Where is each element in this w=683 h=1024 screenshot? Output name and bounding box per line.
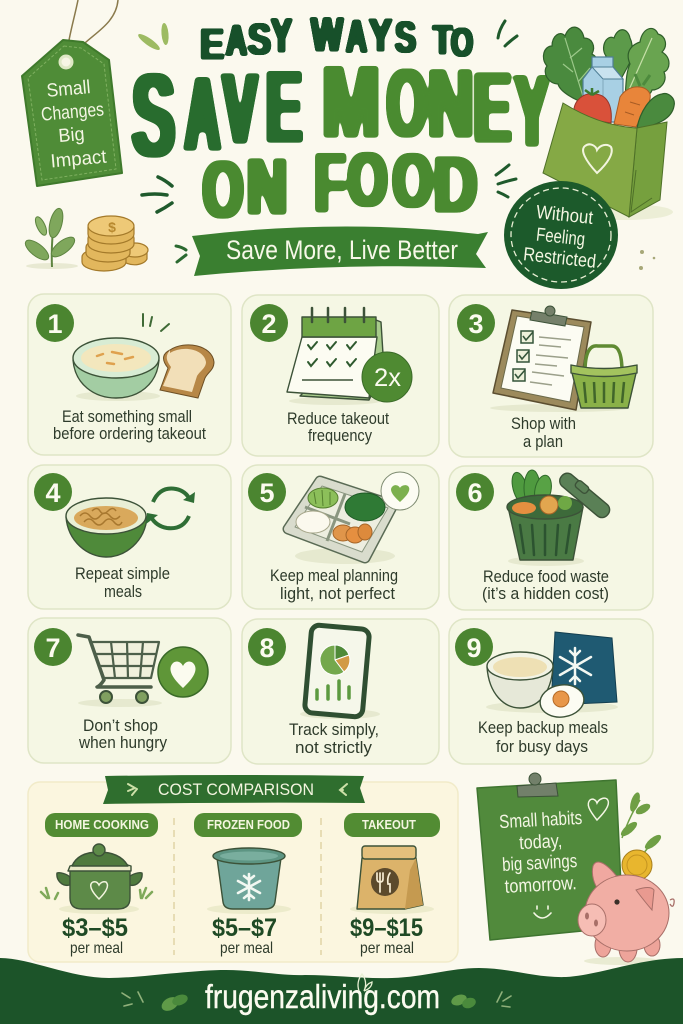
caption 2: frequency (308, 426, 372, 445)
note: small habits clipboard: tomorrow. (504, 873, 577, 898)
column: home cooking: $3–$5 (62, 914, 128, 942)
caption 1: before ordering takeout (53, 424, 206, 443)
number 8: 8 (259, 633, 275, 663)
title: easy ways to: A (346, 10, 367, 62)
caption 5: Keep meal planning (270, 566, 398, 585)
caption 4: Repeat simple (75, 564, 170, 583)
icon: compost bin with scraps (507, 470, 612, 566)
caption 8 (289, 720, 379, 757)
note: small habits clipboard (477, 773, 623, 940)
caption 6 (482, 567, 609, 603)
number 3: 3 (468, 309, 484, 339)
title: on food: O (203, 145, 243, 235)
caption 3 (511, 414, 576, 451)
tag: small changes big impact (22, 0, 122, 186)
caption 7: Don’t shop (83, 716, 158, 735)
text: Y (515, 54, 549, 168)
title: easy ways to: E (200, 20, 224, 69)
icon: leaves behind piggy bank (619, 791, 663, 860)
decorative accents around title (136, 21, 655, 270)
footer band (0, 958, 683, 1024)
icon: calendar with 2x: 2x (374, 364, 402, 392)
caption 9: for busy days (496, 737, 588, 756)
icon: bowl and bread (73, 314, 214, 401)
number 6 (456, 473, 494, 511)
panel: tip 8 (242, 619, 439, 764)
number 6: 6 (467, 478, 483, 508)
column: takeout: per meal (360, 940, 414, 957)
title: money: O (387, 50, 427, 157)
panel: tip 1 (28, 294, 231, 455)
number 9: 9 (466, 633, 482, 663)
note: small habits clipboard: big savings (502, 851, 578, 876)
column: frozen food: $5–$7 (212, 914, 277, 942)
title: on food: D (434, 140, 477, 229)
title: easy ways to: S (395, 13, 416, 62)
icon: pot (41, 844, 152, 914)
icon: meal prep box (288, 472, 419, 564)
number 7 (34, 628, 72, 666)
title: save: E (266, 50, 302, 164)
title: money: N (428, 49, 473, 158)
number 9 (455, 628, 493, 666)
panel: tip 5 (242, 465, 439, 609)
caption 9 (478, 718, 608, 756)
website address: frugenzaliving.com (205, 978, 440, 1015)
note: small habits clipboard: Small habits (499, 808, 583, 833)
icon: leaf sprig above text (358, 974, 372, 991)
number 1 (36, 304, 74, 342)
number 8 (248, 628, 286, 666)
number 3 (457, 304, 495, 342)
title: save: V (223, 53, 257, 165)
title: easy ways to: O (451, 21, 473, 65)
caption 3: a plan (523, 432, 563, 451)
number 5 (248, 473, 286, 511)
title: save (132, 50, 302, 182)
number 2: 2 (261, 309, 277, 339)
heading banner: cost comparison: COST COMPARISON (158, 780, 314, 799)
caption 6: Reduce food waste (483, 567, 609, 586)
tag: small changes big impact: Big (58, 124, 85, 147)
title: easy ways to: Y (369, 9, 392, 61)
column: frozen food: FROZEN FOOD (207, 817, 290, 832)
caption 5 (270, 566, 398, 603)
panel: tip 4 (28, 465, 231, 609)
icon: coin stack: $ (108, 219, 116, 235)
title: on food (203, 136, 477, 235)
icon: oatmeal, egg and freezer bag (486, 632, 618, 720)
title: easy ways to: S (248, 15, 271, 64)
column: frozen food (194, 813, 302, 957)
title: easy ways to: A (226, 16, 247, 65)
icon: sprout (22, 207, 78, 269)
number 5: 5 (259, 478, 275, 508)
caption 2: Reduce takeout (287, 409, 389, 428)
icon: bowl with repeat arrows (66, 489, 195, 557)
icon: shopping cart and heart (78, 635, 208, 707)
tag: small changes big impact: Changes (40, 99, 105, 126)
badge: without feeling restricted: Without (535, 202, 595, 229)
badge: without feeling restricted (504, 181, 618, 289)
number 4: 4 (45, 478, 61, 508)
caption 5: light, not perfect (280, 584, 395, 603)
number 7: 7 (45, 633, 61, 663)
title: on food: O (393, 139, 432, 224)
title: money: M (322, 45, 380, 159)
icon: piggy bank with coin (578, 850, 674, 965)
banner: save more live better (192, 226, 488, 276)
title: save: A (185, 56, 220, 173)
badge: without feeling restricted: Feeling (535, 225, 586, 251)
badge: without feeling restricted: Restricted (522, 244, 597, 273)
panel: tip 7 (28, 618, 231, 763)
caption 2 (287, 409, 389, 445)
panel: tip 9 (449, 619, 653, 764)
caption 1: Eat something small (62, 407, 192, 426)
caption 9: Keep backup meals (478, 718, 608, 737)
icon: calendar with 2x (287, 308, 412, 405)
tag: small changes big impact: Small (46, 77, 91, 102)
title: on food: F (315, 136, 345, 230)
caption 6: (it’s a hidden cost) (482, 584, 609, 603)
title: easy ways to (200, 9, 473, 69)
panel: cost comparison (28, 775, 458, 962)
column: home cooking: per meal (70, 940, 123, 957)
banner: save more live better: Save More, Live Better (226, 235, 458, 265)
title: save: S (132, 50, 175, 182)
note: small habits clipboard: today, (519, 831, 563, 854)
title: easy ways to: T (433, 16, 452, 63)
icon: coin stack (82, 216, 148, 271)
column: takeout: TAKEOUT (362, 817, 416, 832)
caption 7: when hungry (78, 733, 167, 752)
panel: tip 3 (449, 295, 653, 457)
title: money (322, 45, 549, 168)
icon: frozen container (207, 848, 291, 914)
caption 3: Shop with (511, 414, 576, 433)
caption 4: meals (104, 582, 142, 601)
caption 1 (53, 407, 206, 443)
column: home cooking (41, 813, 158, 957)
icon: takeout bag (350, 846, 434, 914)
number 1: 1 (47, 309, 63, 339)
panel: tip 6 (449, 466, 653, 610)
title: easy ways to: Y (271, 10, 292, 63)
caption 4 (75, 564, 170, 601)
number 4 (34, 473, 72, 511)
footer leaves and dashes (122, 992, 511, 1014)
number 2 (250, 304, 288, 342)
icon: phone with chart (300, 625, 380, 719)
title: on food: O (348, 138, 387, 223)
title: easy ways to: W (311, 9, 343, 62)
heading banner: cost comparison (103, 775, 365, 804)
title: money: E (474, 52, 511, 164)
panel: tip 2 (242, 295, 439, 456)
caption 8: not strictly (295, 738, 372, 757)
icon: clipboard checklist and basket (490, 306, 637, 412)
column: home cooking: HOME COOKING (55, 817, 149, 832)
column: takeout: $9–$15 (350, 914, 423, 942)
caption 8: Track simply, (289, 720, 379, 739)
column: takeout (344, 813, 440, 957)
icon: grocery bag with vegetables (543, 27, 674, 220)
caption 7 (78, 716, 167, 752)
tag: small changes big impact: Impact (50, 147, 108, 172)
title: on food: N (247, 142, 287, 231)
column: frozen food: per meal (220, 940, 273, 957)
